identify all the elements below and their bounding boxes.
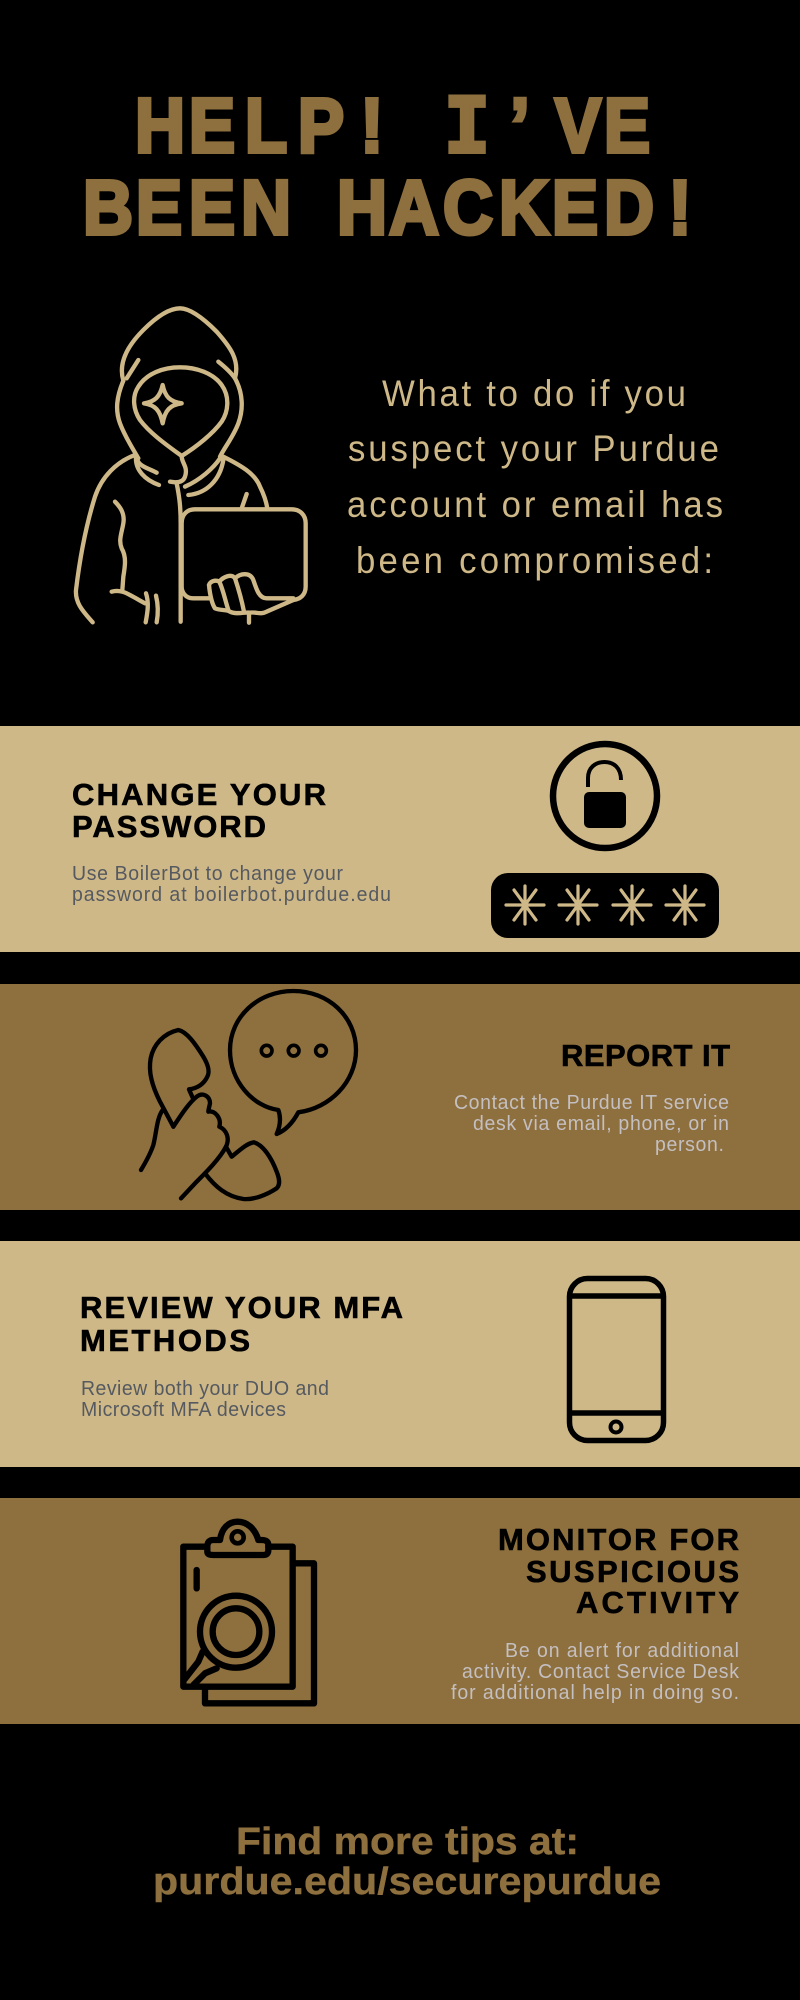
- panel: report it: [0, 984, 800, 1210]
- heading: monitor for suspicious activity: [498, 1522, 739, 1620]
- text: change password instructions: password at boilerbot.purdue.edu: [72, 884, 391, 906]
- text: report instructions: person.: [655, 1134, 724, 1156]
- heading: monitor for suspicious activity: MONITOR FOR: [498, 1522, 739, 1557]
- intro text: account or email has: [347, 484, 723, 525]
- text: monitoring instructions: Be on alert for additional: [505, 1640, 739, 1662]
- heading: change your password: PASSWORD: [72, 809, 266, 844]
- title: HELP! I ’VE: [135, 82, 650, 177]
- text: report instructions: Contact the Purdue IT service: [454, 1092, 729, 1114]
- title: BEEN HACKED!: [83, 165, 692, 251]
- intro text: suspect your Purdue: [348, 428, 719, 469]
- footer: more tips link: Find more tips at:: [236, 1821, 579, 1863]
- heading: report it: REPORT IT: [561, 1038, 730, 1073]
- icon: open padlock: [553, 744, 657, 848]
- text: MFA instructions: Microsoft MFA devices: [81, 1399, 286, 1421]
- text: monitoring instructions: for additional help in doing so.: [451, 1682, 739, 1704]
- text: change password instructions: Use BoilerBot to change your: [72, 863, 343, 885]
- footer: more tips link: purdue.edu/securepurdue: [153, 1861, 661, 1903]
- intro text: been compromised:: [356, 540, 713, 581]
- icon: hooded hacker holding a laptop: [76, 308, 306, 623]
- title: [83, 82, 692, 251]
- heading: monitor for suspicious activity: SUSPICIOUS: [526, 1554, 739, 1589]
- intro text: [347, 373, 723, 581]
- heading: monitor for suspicious activity: ACTIVITY: [576, 1585, 739, 1620]
- icon: clipboard with magnifying glass: [183, 1522, 314, 1703]
- heading: review your MFA methods: REVIEW YOUR MFA: [80, 1290, 403, 1325]
- icon: masked password field: [491, 873, 719, 938]
- text: MFA instructions: Review both your DUO and: [81, 1378, 329, 1400]
- icon: hand holding phone receiver with speech bubble: [141, 991, 356, 1199]
- text: monitoring instructions: [451, 1640, 740, 1704]
- text: report instructions: [454, 1092, 729, 1156]
- text: monitoring instructions: activity. Contact Service Desk: [462, 1661, 740, 1683]
- heading: review your MFA methods: METHODS: [80, 1323, 250, 1358]
- intro text: What to do if you: [382, 373, 686, 414]
- text: report instructions: desk via email, phone, or in: [473, 1113, 729, 1135]
- icon: smartphone: [570, 1278, 664, 1440]
- panel: review your MFA methods: [0, 1241, 800, 1467]
- text: MFA instructions: [81, 1378, 329, 1421]
- heading: change your password: CHANGE YOUR: [72, 777, 326, 812]
- footer: more tips link: [153, 1821, 661, 1903]
- panel: monitor for suspicious activity: [0, 1498, 800, 1724]
- text: change password instructions: [72, 863, 391, 906]
- panel: change your password: [0, 726, 800, 952]
- heading: change your password: [72, 777, 326, 844]
- heading: review your MFA methods: [80, 1290, 403, 1358]
